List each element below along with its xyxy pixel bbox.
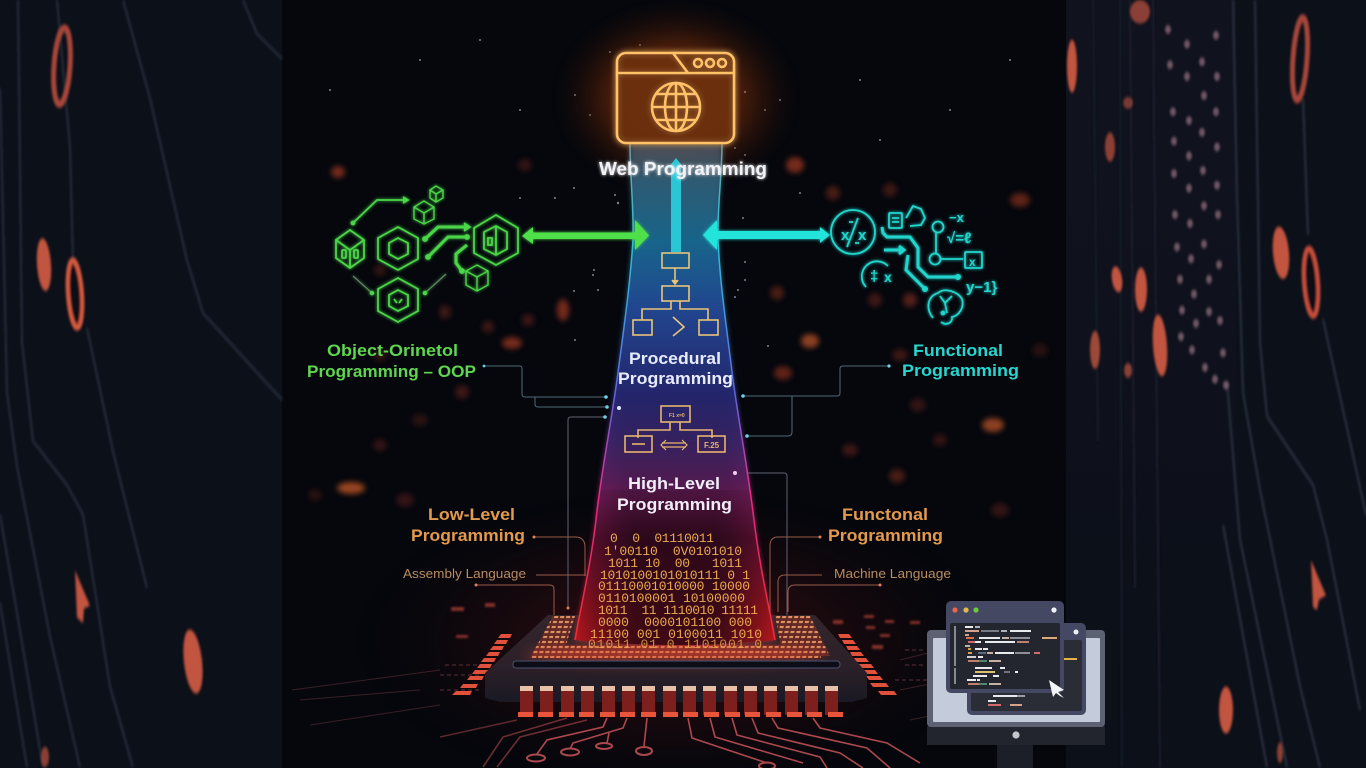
math formulas	[870, 210, 997, 296]
math formulas: y−1}	[966, 279, 997, 296]
background: left circuit panel	[0, 0, 282, 768]
printed circuit traces	[292, 640, 1010, 768]
document and cycle	[889, 206, 925, 228]
heading: procedural: Programming	[618, 369, 733, 388]
label: assembly language: Assembly Language	[403, 567, 526, 581]
label: low-level: Low-Level	[428, 505, 515, 524]
math formulas: x	[884, 269, 892, 285]
code lines	[954, 626, 1057, 685]
chip surface pattern	[530, 616, 830, 658]
math formulas: x	[969, 255, 976, 269]
leader line dots	[474, 364, 891, 610]
icon group: functional	[831, 206, 997, 324]
back window	[967, 623, 1086, 715]
label: functional	[902, 341, 1019, 380]
icon group: object-oriented	[336, 186, 518, 322]
arc	[862, 261, 888, 287]
icon: high-level flowchart: F.25	[704, 441, 720, 450]
heading: web programming: Web Programming	[599, 159, 767, 179]
cube module	[336, 230, 364, 268]
right side pins	[838, 634, 897, 695]
starfield particles	[329, 39, 1011, 347]
label: machine language: Machine Language	[834, 567, 951, 581]
label: functional: Functional	[913, 341, 1003, 360]
arrow: green, OOP to tower	[522, 220, 649, 250]
binary code stream: 0000 0000101100 000	[598, 615, 752, 630]
icon: web browser with globe	[617, 53, 734, 143]
hexagon interface	[474, 215, 518, 265]
monitor stand	[997, 745, 1033, 768]
left side pins	[452, 634, 512, 695]
hexagon class	[378, 227, 418, 270]
icon: procedural flowchart	[633, 253, 718, 336]
arrow: cyan, functional to tower	[703, 220, 830, 250]
power dot	[1012, 731, 1020, 739]
chip slot	[513, 661, 840, 668]
binary code stream: 1011 11 1110010 11111	[598, 603, 758, 618]
front pins	[518, 686, 843, 717]
hexagon object	[378, 278, 418, 322]
math formulas: ‡	[870, 268, 878, 285]
label: functonal	[828, 505, 943, 545]
binary code stream: 1010100101010111 0 1	[600, 568, 750, 583]
monitor chin	[927, 726, 1105, 745]
binary code stream: 1'00110 0V0101010	[604, 544, 742, 559]
chip base glow	[525, 646, 825, 664]
label: low-level	[411, 505, 525, 545]
processor chip	[452, 615, 897, 717]
binary code stream: 0 0 01110011	[610, 531, 714, 546]
leader lines	[476, 366, 889, 615]
monitor bezel	[927, 630, 1105, 727]
PCB side marks	[451, 603, 920, 649]
math formulas: −x	[949, 210, 965, 225]
heading: procedural: Procedural	[629, 349, 721, 368]
upward arrow in tower	[668, 158, 684, 252]
connectors	[352, 197, 470, 294]
monitor with code windows	[927, 601, 1105, 768]
label: functonal: Programming	[828, 526, 943, 545]
binary code stream: 01011 01 0 1101001 0	[588, 637, 762, 652]
traffic lights	[952, 607, 958, 613]
math formulas: √=ℓ	[947, 230, 971, 247]
small cubes	[414, 186, 488, 291]
binary code stream: 1011 10 00 1011	[608, 556, 742, 571]
icon: high-level flowchart	[625, 406, 725, 452]
mouse cursor	[1049, 680, 1064, 698]
heading: procedural	[618, 349, 733, 388]
heading: high-level: Programming	[617, 495, 732, 514]
function circle	[831, 210, 875, 254]
label: low-level: Programming	[411, 526, 525, 545]
function circle: x	[858, 227, 867, 244]
heading: high-level	[617, 474, 732, 514]
chip body	[485, 615, 867, 702]
label: object-oriented: Programming – OOP	[307, 362, 476, 381]
label: functonal: Functonal	[842, 505, 928, 524]
background: right circuit panel	[1066, 0, 1366, 768]
binary code stream: 01110001010000 10000	[598, 579, 750, 594]
label: functional: Programming	[902, 361, 1019, 380]
binary code stream: 0110100001 10100000	[598, 591, 745, 606]
front window	[946, 601, 1064, 693]
label: object-oriented	[307, 341, 476, 381]
icon: high-level flowchart: F1 x=0	[669, 413, 685, 419]
chip surface tint	[530, 616, 830, 658]
monitor screen	[933, 638, 1100, 722]
central light tower	[575, 143, 775, 645]
label: object-oriented: Object-Orinetol	[327, 341, 458, 360]
glow behind web icon	[551, 0, 801, 198]
trace connectors	[882, 227, 960, 290]
function circle: x	[841, 227, 850, 244]
bokeh lights	[308, 157, 1048, 517]
binary code stream	[588, 531, 762, 652]
binary code stream: 11100 001 0100011 1010	[590, 627, 762, 642]
brain blob	[928, 290, 963, 324]
heading: high-level: High-Level	[628, 474, 720, 493]
glow behind processor	[355, 490, 995, 768]
node tree	[930, 222, 982, 268]
